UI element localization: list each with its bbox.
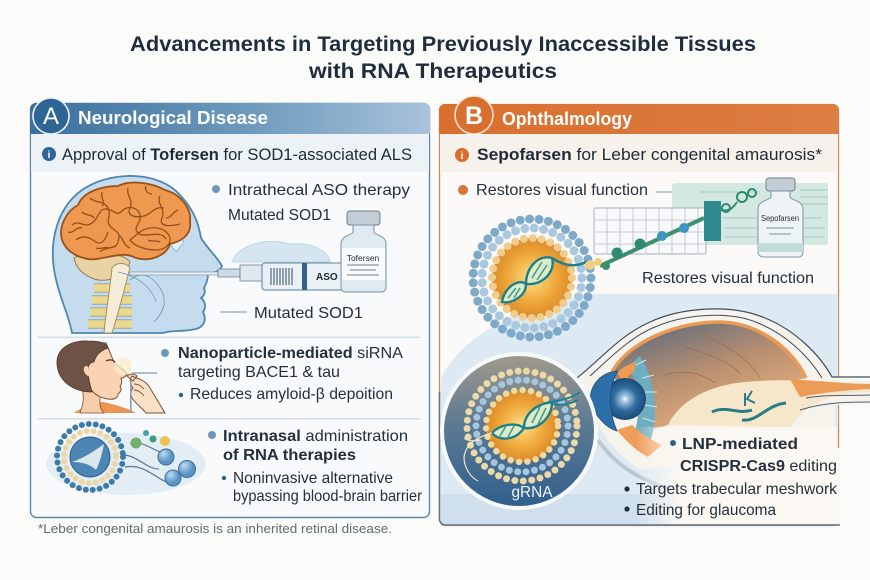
label: nanoparticle-mediated siRNA: Nanoparticle-mediated siRNA: [178, 345, 403, 362]
panel B subheading: [440, 134, 838, 172]
label: intrathecal ASO therapy: Intrathecal ASO therapy: [228, 182, 410, 199]
label: nanoparticle-mediated siRNA: targeting BACE1 & tau: [178, 364, 340, 381]
panel A: neurological disease: [30, 98, 430, 518]
label: intranasal administration: [208, 428, 423, 505]
label: nanoparticle-mediated siRNA: Reduces amyloid-β depoition: [190, 386, 393, 403]
panel B: ophthalmology: [439, 96, 870, 526]
illustration: syringe and needle: ASO: [316, 272, 338, 283]
panel B header bar: [439, 96, 839, 134]
label: intranasal administration: bypassing blood-brain barrier: [233, 488, 423, 505]
label: nanoparticle-mediated siRNA: [161, 345, 403, 403]
panel B lower border: [440, 392, 840, 525]
label: LNP-mediated CRISPR-Cas9 editing: CRISPR-Cas9 editing: [680, 458, 837, 475]
illustration: lipid nanoparticle with RNA: [473, 219, 610, 337]
label: mutated SOD1 upper: Mutated SOD1: [228, 207, 331, 224]
panel B header bar: B: [465, 102, 483, 130]
panel A subheading: Approval of Tofersen for SOD1-associated ALS: [62, 145, 412, 164]
label: editing for glaucoma: Editing for glaucoma: [636, 502, 776, 519]
panel B subheading: i: [461, 151, 464, 162]
illustration: Tofersen vial: [341, 211, 386, 292]
panel A subheading: [31, 134, 429, 172]
panel: text backing for CRISPR section: [636, 427, 840, 525]
footnote: *Leber congenital amaurosis is an inherited retinal disease.: [38, 521, 392, 536]
panel A header bar: [30, 98, 430, 134]
label: LNP-mediated CRISPR-Cas9 editing: LNP-mediated: [682, 436, 798, 453]
illustration: Sepofarsen vial: Sepofarsen: [761, 214, 799, 223]
title: with RNA Therapeutics: [308, 59, 557, 83]
label: intranasal administration: Noninvasive alternative: [233, 470, 393, 487]
illustration: Tofersen vial: Tofersen: [347, 253, 380, 263]
panel B header bar: Ophthalmology: [502, 109, 632, 129]
title: [130, 32, 756, 83]
illustration: syringe and needle: [130, 241, 344, 290]
panel A subheading: i: [48, 150, 51, 161]
brain: [61, 183, 190, 259]
panel A header bar: A: [43, 103, 59, 130]
label: intranasal administration: of RNA therapies: [223, 447, 356, 464]
illustration: Sepofarsen vial: [758, 178, 803, 257]
illustration: teal backdrop, grid and oligo chain: [594, 183, 828, 266]
panel B subheading: Sepofarsen for Leber congenital amaurosis*: [477, 145, 822, 164]
panel A header bar: Neurological Disease: [78, 107, 268, 128]
cerebellum: [74, 253, 130, 280]
illustration: gRNA nanoparticle circle: gRNA: [512, 484, 553, 501]
illustration: gRNA nanoparticle circle: [442, 354, 596, 508]
blue background for eye section: [441, 294, 837, 524]
illustration: eye cross-section: [577, 309, 870, 490]
illustration: head with brain and spine: [53, 176, 222, 333]
illustration: person with nasal application: [57, 341, 165, 413]
spine: [88, 288, 132, 324]
title: Advancements in Targeting Previously Inaccessible Tissues: [130, 32, 756, 56]
label: restores visual function lower: Restores visual function: [642, 270, 814, 287]
label: intranasal administration: Intranasal administration: [223, 428, 408, 445]
label: targets trabecular meshwork: Targets trabecular meshwork: [636, 481, 838, 498]
label: restores visual function top: Restores visual function: [476, 182, 648, 199]
label: LNP-mediated CRISPR-Cas9 editing: [670, 436, 837, 475]
brainstem: [104, 264, 130, 333]
illustration: intranasal nanoparticle: [46, 424, 206, 495]
label: mutated SOD1 lower: Mutated SOD1: [254, 305, 363, 322]
